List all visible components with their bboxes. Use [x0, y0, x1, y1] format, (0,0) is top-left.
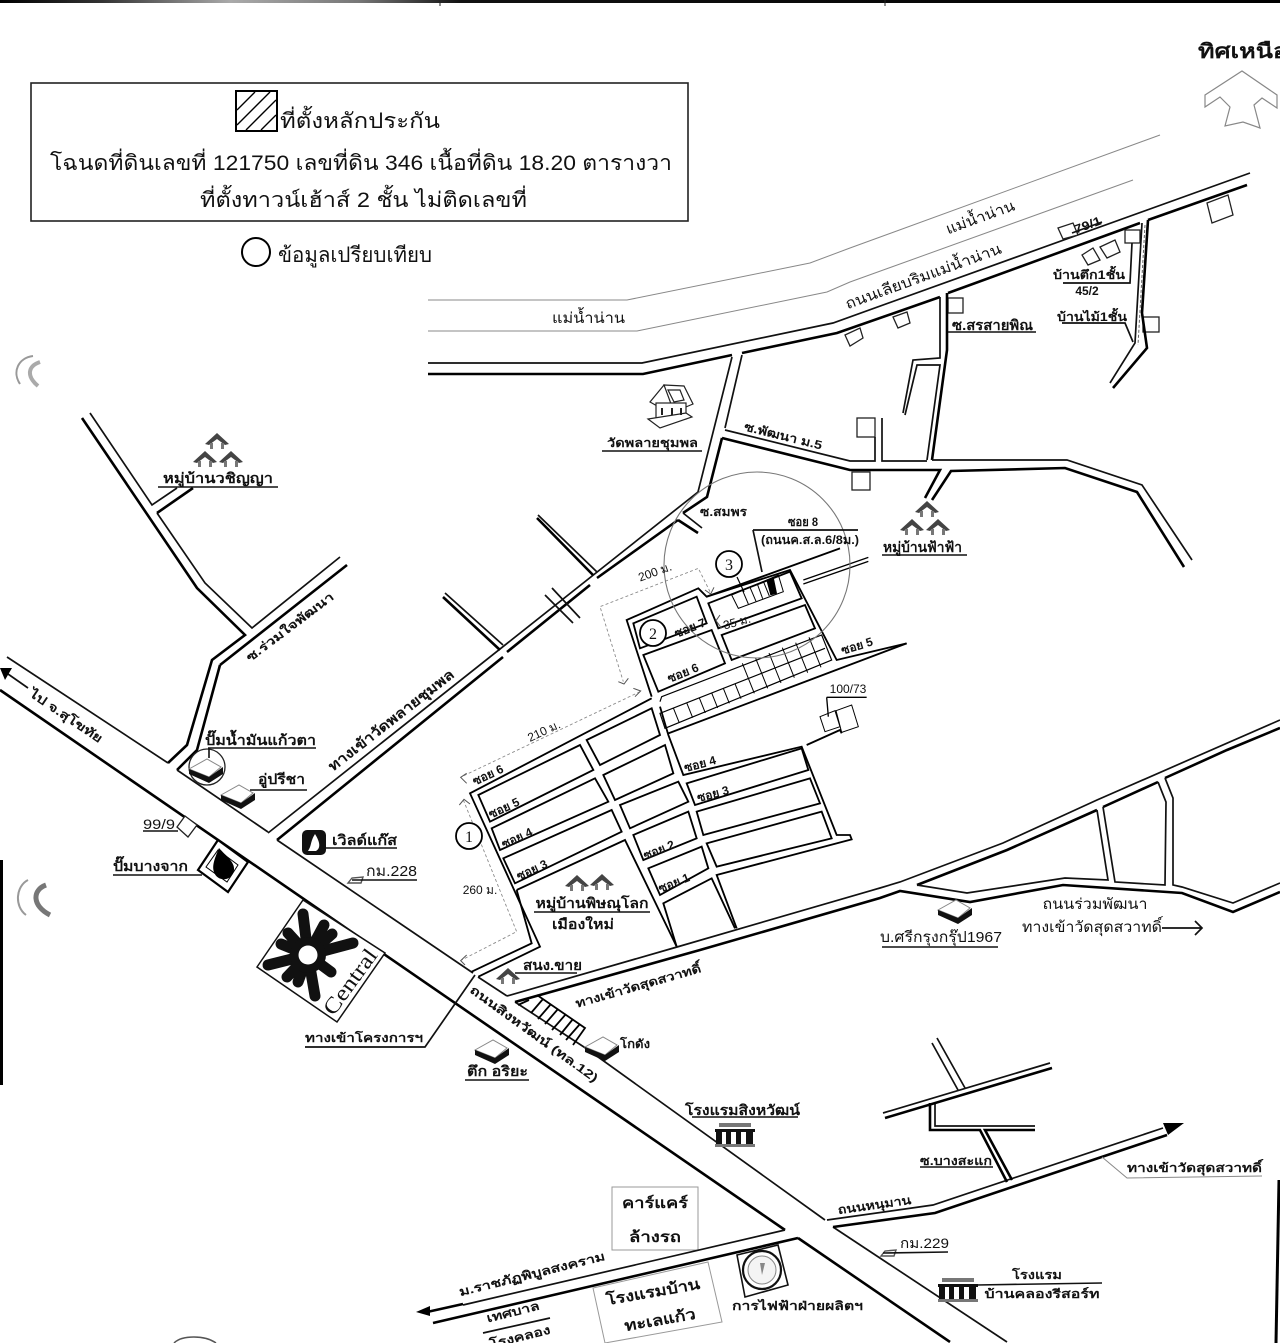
Singhawat hotel — [684, 1101, 800, 1147]
dashed lane at right — [1110, 220, 1148, 388]
Ban Khlong resort: บ้านคลองรีสอร์ท — [984, 1287, 1100, 1301]
electricity authority: การไฟฟ้าฝ่ายผลิตฯ — [732, 1298, 863, 1313]
Ban Khlong resort: โรงแรม — [1011, 1267, 1062, 1282]
car care box — [612, 1187, 698, 1250]
soi labels: ซอย 6 — [665, 660, 701, 686]
project entrance callout: ทางเข้าโครงการฯ — [305, 1030, 423, 1045]
warehouse — [585, 1036, 650, 1061]
right blocks — [660, 707, 852, 928]
labels: right riverside houses: บ้านตึก1ชั้น — [1053, 265, 1126, 282]
labels: right riverside houses — [1053, 214, 1133, 342]
Fifa village: หมู่บ้านฟ้าฟ้า — [883, 539, 962, 556]
icon: north arrow — [1205, 71, 1277, 128]
marker 1: 1 — [465, 829, 473, 846]
car care box: คาร์แคร์ — [622, 1194, 689, 1212]
project entrance callout — [305, 975, 475, 1047]
labels: right riverside houses: 79/1 — [1072, 214, 1104, 236]
Ban Thale Kaeo hotel box — [593, 1262, 722, 1343]
temple icon and label — [602, 385, 702, 451]
World Gas: เวิลด์แก๊ส — [332, 832, 398, 848]
icon: temple — [648, 385, 693, 428]
Hanuman road — [827, 1123, 1184, 1227]
legend box — [31, 83, 688, 221]
Bangchak station — [113, 840, 248, 892]
scan smudge marks — [16, 356, 216, 1343]
row shops along highway — [518, 995, 585, 1045]
blocks soi 8 — [708, 572, 802, 628]
icon: flame — [302, 830, 326, 855]
north heading: ทิศเหนือ — [1198, 40, 1280, 63]
lane label: ซ.ร่วมใจพัฒนา — [243, 589, 337, 664]
riverside houses — [845, 195, 1233, 490]
riverside road — [428, 173, 1250, 374]
river label upper: แม่น้ำน่าน — [943, 195, 1017, 238]
road to Wat Sutsawat — [507, 720, 1280, 1012]
lane: Soi Sorasaipin: ซ.สรสายพิณ — [952, 317, 1033, 333]
brand name: Central — [317, 944, 382, 1020]
label: house 100/73: 100/73 — [830, 682, 867, 696]
soi labels: ซอย 6 — [470, 762, 506, 788]
house 99/9 — [143, 816, 197, 837]
road: Soi Pattana Moo 5 — [722, 418, 1192, 567]
Ban Thale Kaeo hotel box: ทะเลแก้ว — [623, 1306, 697, 1335]
icon: hatched collateral square — [236, 91, 277, 131]
Singhawat hotel: โรงแรมสิงหวัฒน์ — [684, 1101, 800, 1118]
river label lower: แม่น้ำน่าน — [552, 307, 625, 327]
soi labels: ซอย 4 — [499, 825, 535, 851]
Ban Thale Kaeo hotel box: โรงแรมบ้าน — [603, 1274, 702, 1309]
marker 2 — [640, 620, 666, 646]
Srikrung Group 1967 — [880, 900, 1002, 947]
marker km 229 — [881, 1235, 949, 1256]
soi labels: ซอย 5 — [839, 634, 875, 657]
soi labels: ซอย 5 — [486, 795, 522, 821]
legend: comparison data — [242, 238, 432, 268]
arrow — [1162, 921, 1202, 935]
Wachinya village — [158, 433, 278, 487]
block soi 6 — [643, 630, 725, 692]
Central logo — [257, 900, 385, 1022]
soi labels: ซอย 2 — [641, 837, 677, 863]
label: Soi Somporn: ซ.สมพร — [700, 505, 748, 519]
distance labels — [463, 560, 752, 897]
housing estate subdivision — [459, 548, 907, 977]
callout: Wat Sutsawat entrance: ทางเข้าวัดสุดสวาทดิ์ — [1127, 1159, 1264, 1176]
Nan river — [428, 135, 1160, 331]
Bang Sakae lanes — [883, 1038, 1052, 1182]
legend: comparison data: ข้อมูลเปรียบเทียบ — [278, 244, 432, 268]
subject townhouses — [732, 575, 783, 608]
marker km 228: กม.228 — [366, 863, 417, 880]
highway name: ถนนสิงหวัฒน์ (ทล.12) — [467, 983, 601, 1085]
northwest lanes — [82, 413, 347, 770]
circle: comparison radius — [664, 472, 850, 658]
label: Ruam Phatthana road: ทางเข้าวัดสุดสวาทดิ์ — [1022, 916, 1164, 937]
Pricha garage — [221, 771, 307, 809]
electricity authority — [732, 1245, 863, 1313]
road: Soi Pattana Moo 5: ซ.พัฒนา ม.5 — [743, 420, 824, 453]
soi labels: ซอย 3 — [514, 857, 550, 883]
highway 12 — [0, 657, 1007, 1342]
direction to Sukhothai: ไป จ.สุโขทัย — [24, 684, 106, 746]
Pibulsongkram university road: ม.ราชภัฏพิบูลสงคราม — [458, 1249, 607, 1300]
property description: ที่ตั้งทาวน์เฮ้าส์ 2 ชั้น ไม่ติดเลขที่ — [200, 185, 527, 212]
Kaewta gas station: ปั๊มน้ำมันแก้วตา — [205, 729, 316, 748]
callout: Wat Sutsawat entrance — [1102, 1157, 1264, 1178]
dashed distance lines — [600, 568, 710, 682]
callout: Soi 8 — [753, 515, 859, 572]
soi labels: ซอย 7 — [672, 615, 708, 641]
Bang Sakae lanes: ซ.บางสะแก — [920, 1154, 992, 1168]
soi labels — [470, 615, 875, 896]
marker 3 — [716, 551, 744, 592]
labels: right riverside houses: 45/2 — [1075, 284, 1099, 298]
icon: EGAT logo — [737, 1245, 788, 1297]
Phitsanulok Muang Mai village: หมู่บ้านพิษณุโลก — [536, 894, 648, 912]
Ariya building — [465, 1040, 529, 1080]
Kaewta gas station — [189, 729, 316, 785]
Pibulsongkram university road — [416, 1230, 798, 1323]
municipality label — [483, 1299, 552, 1343]
distance labels: 35 ม. — [722, 612, 752, 632]
World Gas — [302, 830, 398, 855]
label: Ruam Phatthana road — [1022, 896, 1202, 937]
Hanuman road: ถนนหนุมาน — [837, 1193, 913, 1218]
Bangchak station: ปั๊มบางจาก — [113, 855, 188, 874]
eastern loop roads — [917, 728, 1280, 903]
Ariya building: ตึก อริยะ — [467, 1063, 528, 1079]
side lanes — [445, 513, 702, 645]
marker 3: 3 — [725, 557, 733, 574]
SNG Chai office — [496, 957, 582, 984]
labels: right riverside houses: บ้านไม้1ชั้น — [1057, 307, 1128, 324]
SNG Chai office: สนง.ขาย — [523, 957, 582, 973]
Ban Khlong resort — [938, 1267, 1102, 1302]
callout: Soi 8: ซอย 8 — [788, 515, 818, 529]
distance labels: 260 ม. — [463, 883, 497, 897]
lower left blocks — [478, 745, 593, 822]
soi labels: ซอย 1 — [656, 870, 692, 896]
icon: sun emblem — [268, 914, 353, 996]
road: Wat Phlai Chumphon access — [268, 355, 742, 840]
direction to Sukhothai — [0, 668, 106, 746]
Srikrung Group 1967: บ.ศรีกรุงกรุ๊ป1967 — [880, 929, 1002, 947]
row house strip — [660, 635, 832, 728]
road label: ถนนเลียบริมแม่น้ำน่าน — [842, 238, 1004, 313]
legend title: ที่ตั้งหลักประกัน — [280, 106, 440, 133]
municipality label: เทศบาล — [485, 1299, 541, 1325]
distance labels: 210 ม. — [525, 717, 563, 745]
Phitsanulok Muang Mai village — [534, 874, 650, 932]
comparison markers — [456, 551, 744, 849]
block 2 — [633, 597, 707, 648]
Phitsanulok Muang Mai village: เมืองใหม่ — [552, 915, 614, 932]
Pricha garage: อู่ปรีชา — [258, 771, 305, 788]
Fifa village — [882, 501, 967, 556]
house 99/9: 99/9 — [143, 816, 175, 832]
warehouse: โกดัง — [619, 1036, 650, 1051]
house 100/73 — [820, 711, 840, 732]
temple label: วัดพลายชุมพล — [607, 436, 698, 451]
distance labels: 200 ม. — [636, 560, 674, 584]
Wachinya village: หมู่บ้านวชิญญา — [163, 470, 273, 487]
soi labels: ซอย 4 — [683, 753, 718, 775]
marker 1 — [456, 823, 482, 849]
callout: Soi 8: (ถนนค.ส.ล.6/8ม.) — [761, 533, 859, 547]
marker km 228 — [348, 863, 417, 883]
outer road edges — [627, 570, 907, 697]
road label: ทางเข้าวัดพลายชุมพล — [325, 666, 458, 775]
deed details: โฉนดที่ดินเลขที่ 121750 เลขที่ดิน 346 เนื้อที่ดิน 18.20 ตารางวา — [50, 148, 672, 175]
marker km 229: กม.229 — [900, 1235, 949, 1251]
road to Wat Sutsawat: ทางเข้าวัดสุดสวาทดิ์ — [573, 959, 705, 1012]
soi labels: ซอย 3 — [696, 783, 731, 805]
marker 2: 2 — [649, 626, 657, 643]
car care box: ล้างรถ — [629, 1229, 681, 1246]
lane: Soi Sorasaipin — [903, 293, 1036, 460]
label: Ruam Phatthana road: ถนนร่วมพัฒนา — [1042, 896, 1148, 913]
